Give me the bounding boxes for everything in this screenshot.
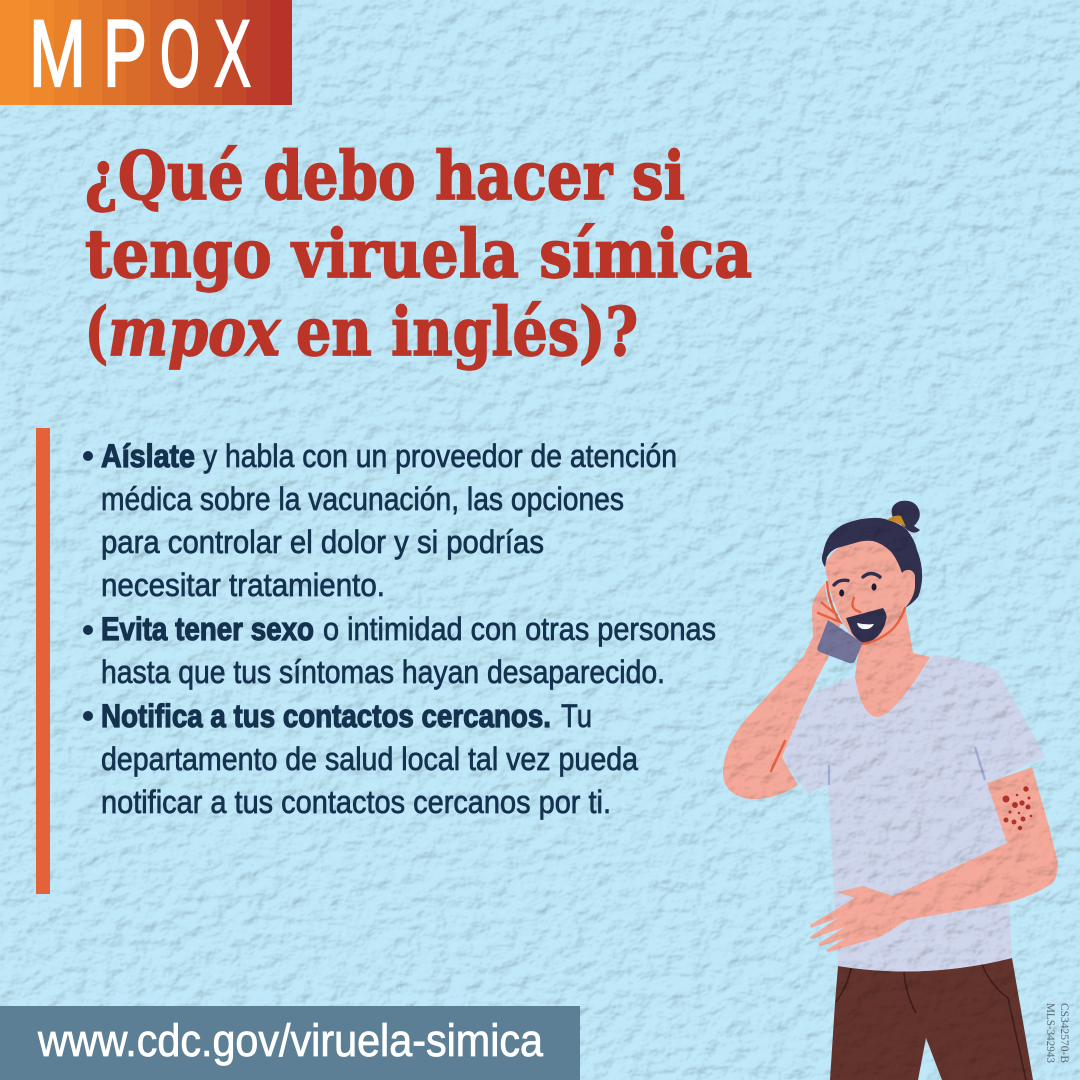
document codes: MLS-342943 xyxy=(1044,1003,1056,1063)
header title: X xyxy=(214,1,251,107)
main heading: ¿Qué debo hacer si xyxy=(85,137,685,215)
nose and jaw xyxy=(852,598,905,644)
bullet 2: Evita tener sexo xyxy=(101,611,314,647)
main heading: ( xyxy=(85,293,108,371)
raised arm xyxy=(723,583,840,799)
bullet list xyxy=(83,438,716,820)
footer bar xyxy=(0,1006,580,1080)
lower arm xyxy=(810,767,1058,952)
header title: O xyxy=(160,1,200,107)
bullet 2: o intimidad con otras personas xyxy=(323,611,716,647)
shirt xyxy=(782,655,1045,971)
main heading xyxy=(85,137,752,371)
footer url: www.cdc.gov/viruela-simica xyxy=(37,1015,544,1066)
header title: M xyxy=(29,1,86,107)
main heading: en inglés)? xyxy=(296,293,638,371)
hair xyxy=(822,518,922,608)
bullet 2: hasta que tus síntomas hayan desaparecido. xyxy=(101,654,665,690)
bullet 1: médica sobre la vacunación, las opciones xyxy=(101,481,624,517)
document codes: CS342570-B xyxy=(1058,1003,1070,1063)
neck xyxy=(855,605,930,717)
bullet 1: para controlar el dolor y si podrías xyxy=(101,524,544,560)
bullet 2 xyxy=(83,611,716,690)
head xyxy=(822,501,922,644)
bullet 1: Aíslate xyxy=(101,438,195,474)
main heading: mpox xyxy=(108,293,281,371)
header title: P xyxy=(103,1,147,107)
bullet 3: notificar a tus contactos cercanos por ti. xyxy=(101,784,611,820)
brows xyxy=(834,574,880,585)
hair bun xyxy=(887,501,920,533)
bullet 3: Tu xyxy=(561,698,592,734)
illustration: man on phone xyxy=(723,501,1058,1080)
bullet 1: y habla con un proveedor de atención xyxy=(203,438,677,474)
rash xyxy=(1002,786,1032,830)
eyes xyxy=(839,583,876,597)
trousers xyxy=(830,958,1033,1080)
hand lines xyxy=(818,582,840,622)
bullet 3 xyxy=(83,698,638,820)
bullet 1 xyxy=(83,438,677,603)
phone xyxy=(817,620,862,663)
teeth xyxy=(857,623,874,629)
accent bar xyxy=(36,428,50,894)
header title xyxy=(29,1,251,107)
document codes xyxy=(1044,1003,1070,1063)
bullet 3: Notifica a tus contactos cercanos. xyxy=(101,698,551,734)
header banner xyxy=(0,0,292,107)
bullet 1: necesitar tratamiento. xyxy=(101,567,385,603)
main heading: tengo viruela símica xyxy=(85,215,752,293)
bullet 3: departamento de salud local tal vez pueda xyxy=(101,741,638,777)
beard xyxy=(846,608,887,643)
